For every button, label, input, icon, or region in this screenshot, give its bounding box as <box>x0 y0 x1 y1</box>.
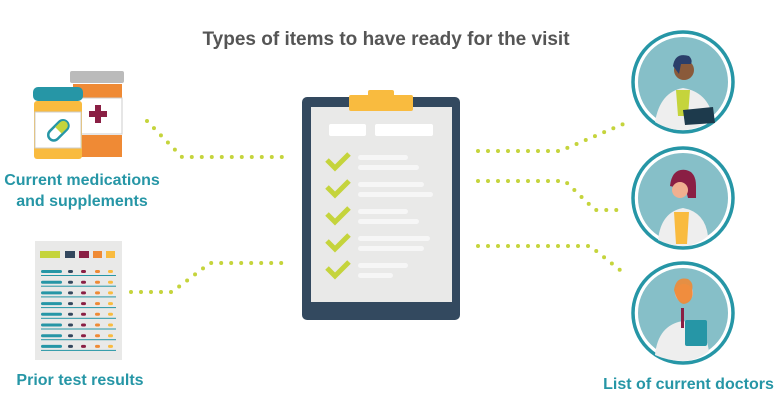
doctor 1 <box>633 32 733 132</box>
doctor 2 <box>633 148 733 248</box>
icon: clipboard <box>302 90 460 320</box>
label: test results: Prior test results <box>16 372 144 389</box>
dotted connectors <box>131 121 628 292</box>
label: doctors: List of current doctors <box>603 376 774 393</box>
doctor 3 <box>633 263 733 363</box>
icon: medication bottles <box>33 71 124 159</box>
title: Types of items to have ready for the visit <box>202 29 570 50</box>
label: medications: Current medications and supplements <box>4 172 160 210</box>
icon: test results sheet <box>35 241 122 360</box>
